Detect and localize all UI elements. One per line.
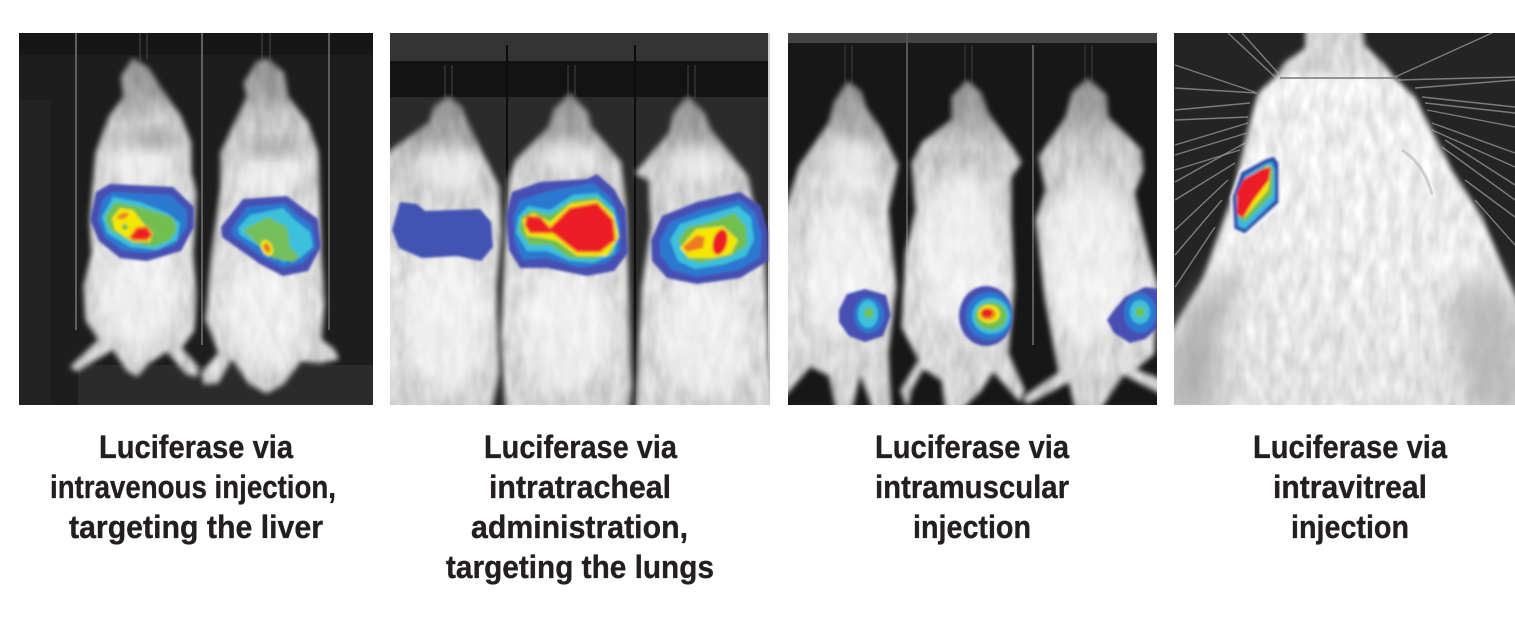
mouse head and body	[1168, 25, 1515, 412]
panel: intravitreal injection	[1165, 25, 1515, 545]
caption: intratracheal: Luciferase via	[484, 429, 678, 465]
caption: intramuscular: intramuscular	[875, 469, 1069, 505]
caption: intramuscular	[875, 429, 1070, 545]
heat signal: mouse 3 lungs	[651, 192, 768, 284]
caption: intravitreal: intravitreal	[1273, 469, 1427, 505]
mouse 3	[1025, 80, 1160, 412]
heat signal: mouse 1 leg	[839, 289, 891, 342]
mouse 1	[375, 98, 500, 412]
panel: intramuscular injection	[780, 33, 1160, 545]
heat signal: eye	[1230, 154, 1281, 236]
caption: intravenous	[50, 429, 336, 545]
panel: intratracheal administration	[375, 33, 775, 585]
whiskers	[1175, 33, 1515, 287]
caption: intratracheal: intratracheal	[489, 469, 671, 505]
photo: close-up of mouse head with eye signal	[1165, 25, 1515, 415]
photo: three mice with leg signal	[780, 33, 1160, 412]
panel: intravenous injection	[19, 33, 373, 545]
heat signal: mouse 2 liver	[221, 196, 321, 276]
caption: intratracheal: administration,	[471, 509, 688, 545]
caption: intravenous: targeting the liver	[69, 509, 323, 545]
mouse 2	[502, 95, 630, 412]
heat signal: mouse 2 leg	[959, 286, 1013, 346]
heat signal: mouse 2 lungs	[506, 174, 628, 276]
mouse 3	[637, 98, 775, 412]
caption: intravitreal	[1253, 429, 1448, 545]
heat signal: mouse 3 leg	[1107, 287, 1160, 343]
shadow: lower left flank	[1174, 257, 1252, 405]
caption: intratracheal	[446, 429, 714, 585]
caption: intratracheal: targeting the lungs	[446, 549, 714, 585]
caption: intramuscular: injection	[913, 509, 1031, 545]
heat signal: mouse 1 lungs	[392, 202, 493, 261]
caption: intravitreal: Luciferase via	[1253, 429, 1448, 465]
shoulder crease	[1402, 150, 1432, 195]
mouse 2	[902, 82, 1023, 412]
mouse 2	[203, 60, 337, 392]
mouse 1	[780, 83, 897, 412]
caption: intravenous: intravenous injection,	[50, 469, 336, 505]
caption: intravitreal: injection	[1291, 509, 1409, 545]
heat signal: mouse 1 liver	[90, 184, 194, 261]
photo: two mice with liver signal	[19, 33, 373, 405]
photo: three mice with lung signal	[375, 33, 775, 412]
mouse 1	[72, 60, 197, 375]
caption: intravenous: Luciferase via	[99, 429, 294, 465]
caption: intramuscular: Luciferase via	[875, 429, 1070, 465]
shadow: lower right flank	[1445, 270, 1515, 415]
